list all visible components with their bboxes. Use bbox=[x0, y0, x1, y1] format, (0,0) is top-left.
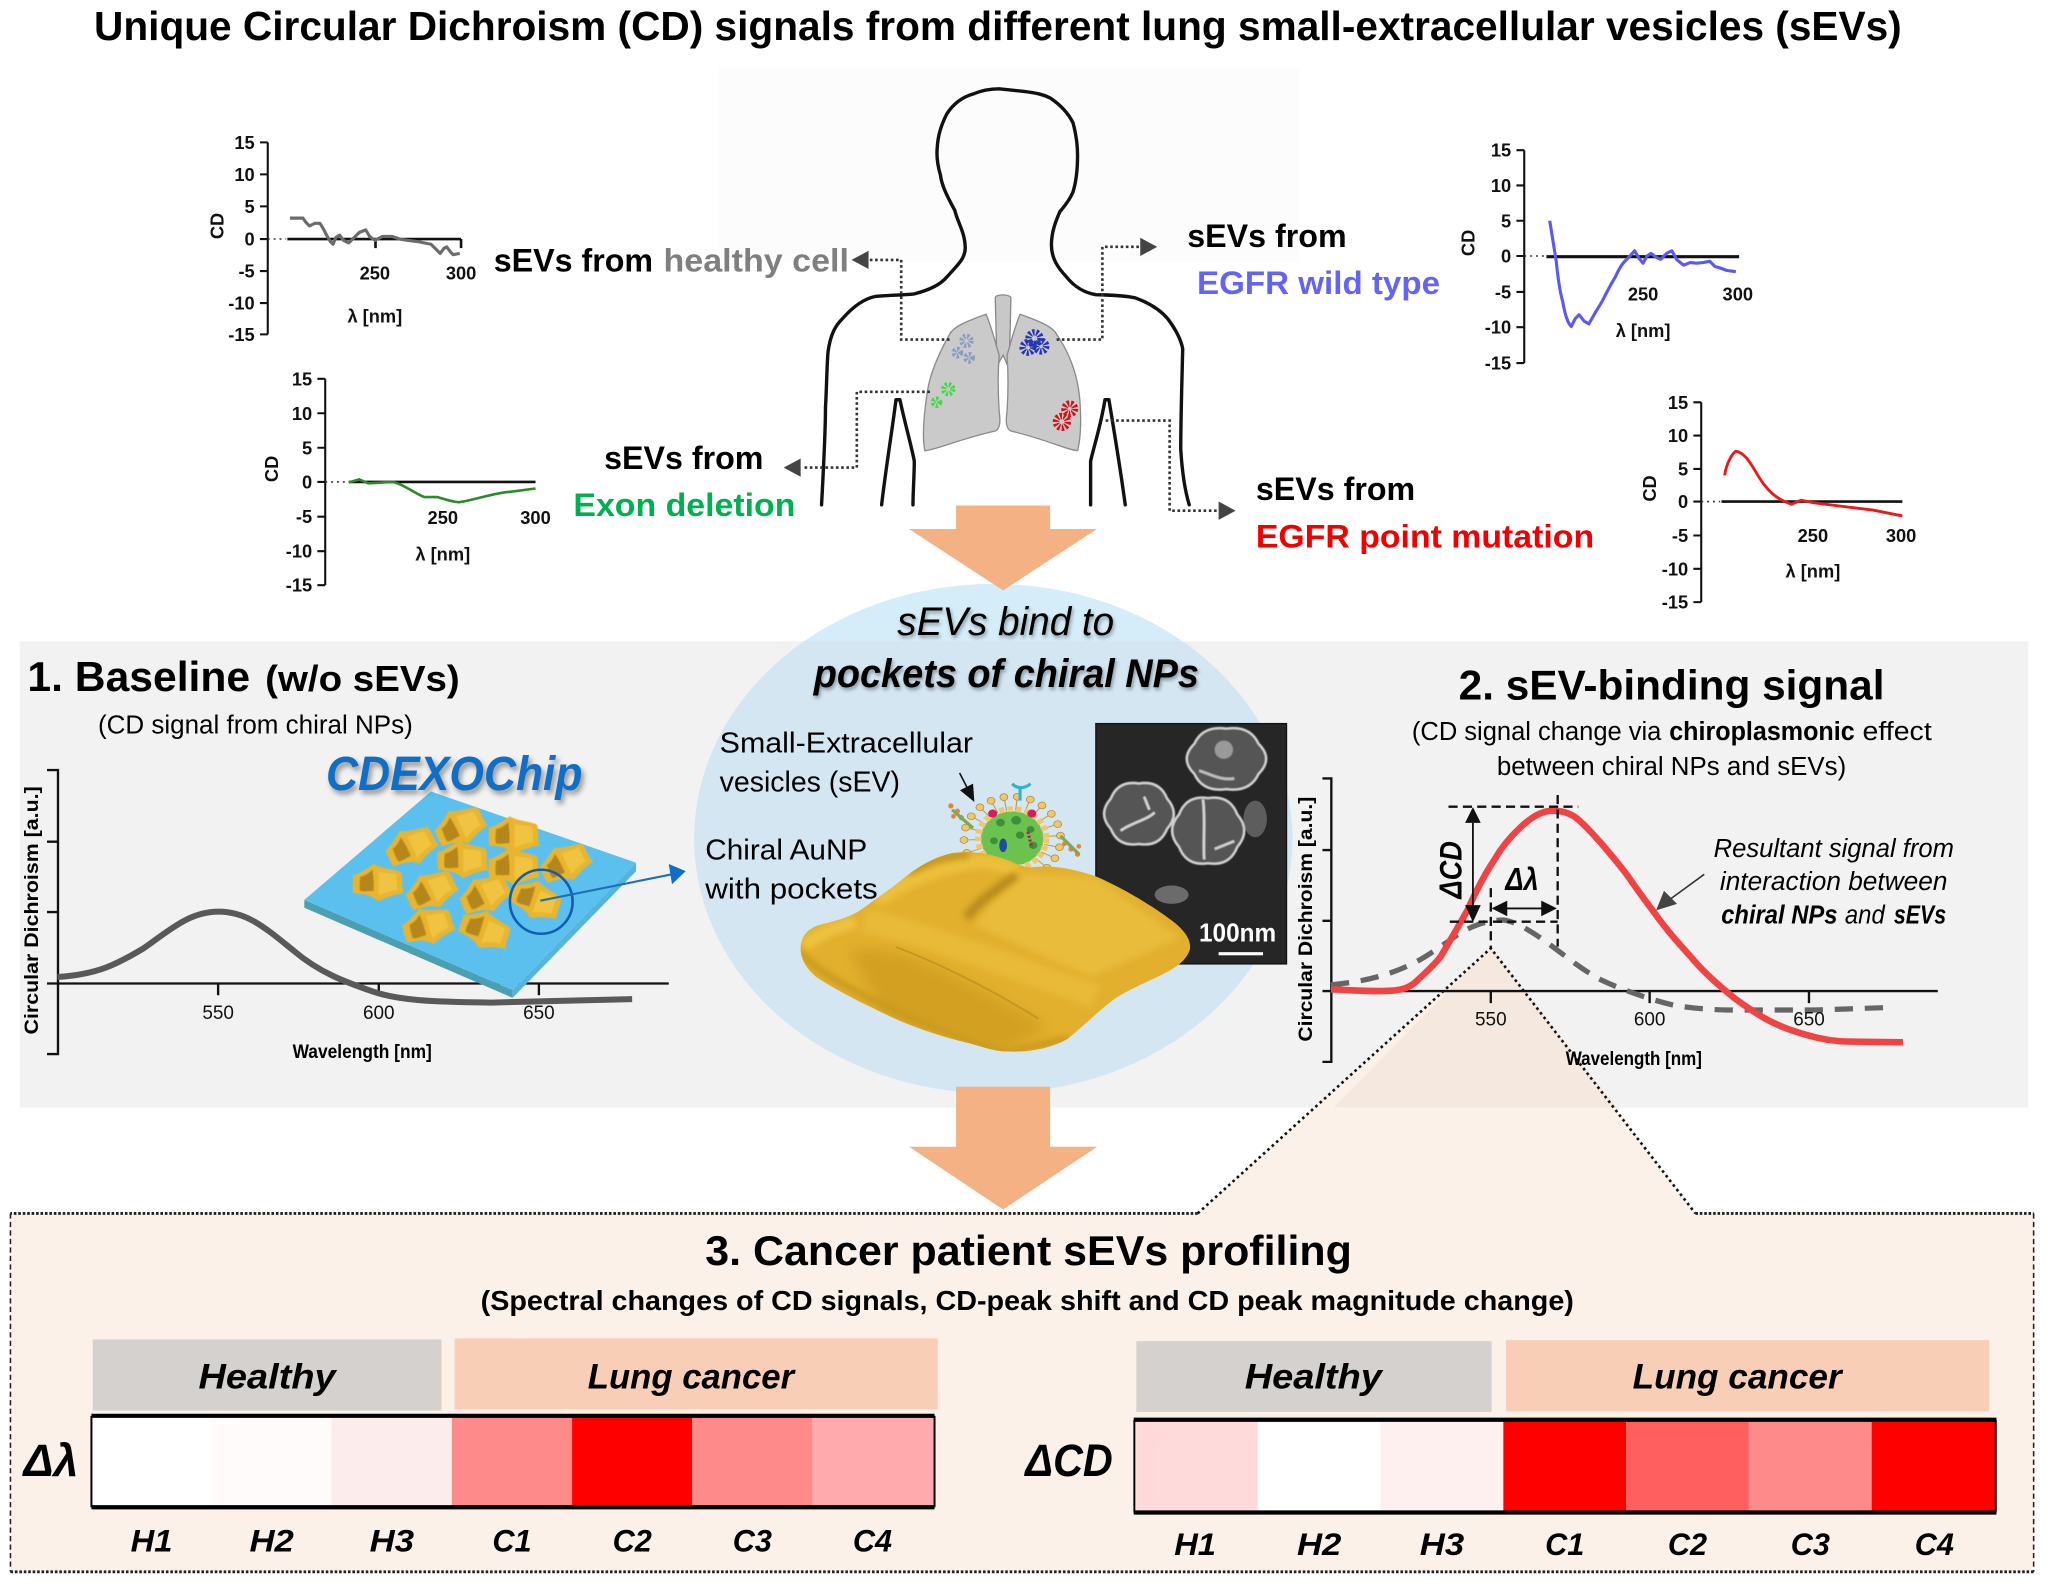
arrow: top orange arrow bbox=[909, 505, 1097, 590]
subtitle: (CD signal change via bbox=[1412, 718, 1662, 746]
icon: human body outline bbox=[822, 89, 1189, 505]
heading: 1. Baseline bbox=[27, 653, 250, 700]
heatmap: delta CD bbox=[1023, 1340, 1996, 1562]
heading: 2. sEV-binding signal bbox=[1459, 661, 1884, 708]
subtitle: effect bbox=[1863, 718, 1932, 746]
heatmap: delta CD: H2 bbox=[1297, 1527, 1342, 1562]
chart: EGFR wild type CD spectrum: 300 bbox=[1723, 283, 1753, 304]
chart: EGFR wild type CD spectrum: 250 bbox=[1628, 283, 1658, 304]
chart: baseline CD curve: Wavelength [nm] bbox=[293, 1042, 432, 1063]
icon: small extracellular vesicle bbox=[948, 784, 1081, 873]
chart: exon deletion CD spectrum: 5 bbox=[302, 437, 312, 458]
title: Unique Circular Dichroism (CD) signals from different lung small-extracellular vesicles (sEVs) bbox=[94, 3, 1902, 49]
chart: sEV-binding CD curves: Circular Dichroism [a.u.] bbox=[1295, 797, 1317, 1042]
chart: EGFR wild type CD spectrum: -15 bbox=[1485, 353, 1511, 374]
text block: resultant signal note: sEVs bbox=[1894, 901, 1946, 929]
chart: baseline CD curve: Circular Dichroism [a.u.] bbox=[21, 786, 43, 1034]
chart: EGFR point mutation CD spectrum: 0 bbox=[1678, 491, 1688, 512]
chart: sEV-binding CD curves: 550 bbox=[1475, 1009, 1507, 1030]
subtitle: chiroplasmonic bbox=[1669, 718, 1855, 746]
panel: 2. sEV-binding signal bbox=[1295, 661, 1954, 1070]
chart: EGFR wild type CD spectrum bbox=[1458, 140, 1753, 374]
text block: AuNP label bbox=[704, 834, 878, 906]
chart: healthy CD spectrum: 0 bbox=[245, 229, 255, 250]
heatmap: delta CD: H3 bbox=[1420, 1527, 1465, 1562]
chart: sEV-binding CD curves: 600 bbox=[1634, 1009, 1665, 1030]
text block: circle heading: pockets of chiral NPs bbox=[813, 652, 1199, 696]
text block: healthy cell label bbox=[494, 243, 849, 279]
arrow: to EGFR wild type label bbox=[1057, 238, 1157, 340]
image: SEM micrograph bbox=[1096, 724, 1287, 964]
background patch behind head bbox=[718, 67, 1300, 263]
text block: sEV label bbox=[720, 727, 974, 799]
panel: cancer patient profiling background bbox=[10, 948, 2034, 1572]
chart: EGFR wild type CD spectrum: -5 bbox=[1495, 281, 1511, 302]
chart: EGFR wild type CD spectrum: -10 bbox=[1485, 317, 1511, 338]
arrow: sEV pointer bbox=[960, 773, 974, 802]
heatmap: delta CD: H1 bbox=[1174, 1527, 1216, 1562]
label: delta lambda: Δλ bbox=[1505, 862, 1539, 897]
heatmap: delta lambda: Δλ bbox=[22, 1435, 78, 1486]
text block: EGFR point mutation label bbox=[1256, 471, 1594, 554]
heatmap: delta lambda: C4 bbox=[853, 1524, 892, 1559]
text block: AuNP label: with pockets bbox=[704, 874, 878, 906]
chart: exon deletion CD spectrum: λ [nm] bbox=[415, 543, 470, 564]
text block: sEV label: vesicles (sEV) bbox=[720, 767, 900, 799]
text block: circle heading: sEVs bind to bbox=[897, 600, 1114, 644]
heatmap: delta CD: C1 bbox=[1545, 1527, 1584, 1562]
text block: EGFR wild type label: EGFR wild type bbox=[1197, 265, 1440, 301]
chart: healthy CD spectrum: 250 bbox=[360, 263, 390, 284]
chart: EGFR point mutation CD spectrum: 5 bbox=[1678, 458, 1688, 479]
heatmap: delta lambda: C3 bbox=[733, 1524, 772, 1559]
chart: EGFR point mutation CD spectrum: 250 bbox=[1798, 525, 1828, 546]
image: SEM micrograph: 100nm bbox=[1199, 918, 1276, 948]
label: delta CD: ΔCD bbox=[1434, 841, 1469, 899]
panel: central circle bbox=[694, 584, 1292, 1093]
chart: baseline CD curve: 550 bbox=[202, 1003, 234, 1024]
arrow: to healthy cell label bbox=[852, 251, 950, 340]
label: CDEXOChip: CDEXOChip bbox=[326, 747, 583, 801]
heatmap: delta CD: Lung cancer bbox=[1633, 1357, 1844, 1396]
chart: EGFR point mutation CD spectrum: -10 bbox=[1662, 558, 1688, 579]
chart: EGFR point mutation CD spectrum: λ [nm] bbox=[1785, 560, 1840, 581]
chart: healthy CD spectrum: 5 bbox=[245, 196, 255, 217]
chart: exon deletion CD spectrum: 300 bbox=[520, 507, 551, 528]
chart: healthy CD spectrum: -10 bbox=[228, 293, 255, 314]
heatmap: delta lambda: C1 bbox=[492, 1524, 532, 1559]
panel: grey band for steps 1 and 2 bbox=[20, 641, 2028, 1108]
chart: EGFR wild type CD spectrum: λ [nm] bbox=[1616, 320, 1671, 341]
heatmap: delta lambda bbox=[22, 1338, 938, 1559]
heatmap: delta CD: C4 bbox=[1915, 1527, 1954, 1562]
text block: AuNP label: Chiral AuNP bbox=[705, 834, 867, 866]
chart: sEV-binding CD curves bbox=[1295, 778, 1938, 1070]
arrow: delta CD bbox=[1465, 807, 1481, 922]
chart: healthy CD spectrum: -5 bbox=[238, 261, 255, 282]
arrow: chip to nanoparticle bbox=[540, 864, 686, 901]
chart: exon deletion CD spectrum bbox=[261, 368, 551, 596]
text block: sEV label: Small-Extracellular bbox=[720, 727, 974, 759]
chart: healthy CD spectrum: -15 bbox=[228, 324, 255, 345]
panel: 1. Baseline bbox=[21, 653, 686, 1063]
heatmap: delta CD: C2 bbox=[1668, 1527, 1708, 1562]
chart: exon deletion CD spectrum: -10 bbox=[286, 541, 312, 562]
text block: exon deletion label bbox=[573, 440, 795, 523]
chart: sEV-binding CD curves: Wavelength [nm] bbox=[1566, 1049, 1702, 1070]
chart: exon deletion CD spectrum: -15 bbox=[286, 575, 312, 596]
heatmap: delta lambda: Healthy bbox=[199, 1357, 338, 1396]
chart: baseline CD curve bbox=[21, 770, 669, 1063]
heatmap: delta CD: ΔCD bbox=[1023, 1435, 1113, 1486]
chart: EGFR point mutation CD spectrum: 15 bbox=[1668, 392, 1688, 413]
icon: large chiral gold nanoparticle bbox=[801, 852, 1190, 1053]
chart: EGFR point mutation CD spectrum: CD bbox=[1639, 475, 1660, 502]
chart: exon deletion CD spectrum: CD bbox=[261, 456, 282, 482]
heatmap: delta lambda: H1 bbox=[131, 1524, 172, 1559]
chart: healthy CD spectrum: CD bbox=[206, 213, 227, 239]
text block: healthy cell label: sEVs from bbox=[494, 243, 653, 279]
chart: EGFR wild type CD spectrum: 0 bbox=[1501, 246, 1511, 267]
chart: healthy CD spectrum: 15 bbox=[234, 132, 255, 153]
chart: EGFR point mutation CD spectrum: 300 bbox=[1886, 525, 1916, 546]
text block: circle heading bbox=[813, 600, 1199, 696]
icon: CDEXOChip substrate bbox=[304, 792, 636, 998]
chart: exon deletion CD spectrum: 10 bbox=[292, 403, 312, 424]
chart: exon deletion CD spectrum: 0 bbox=[302, 471, 312, 492]
chart: healthy CD spectrum bbox=[206, 132, 476, 345]
subtitle bbox=[1412, 718, 1932, 781]
chart: exon deletion CD spectrum: 15 bbox=[292, 368, 312, 389]
arrow: delta lambda bbox=[1492, 901, 1557, 916]
chart: healthy CD spectrum: 10 bbox=[234, 164, 255, 185]
arrow: to exon deletion label bbox=[784, 392, 930, 477]
subtitle: (Spectral changes of CD signals, CD-peak shift and CD peak magnitude change) bbox=[481, 1285, 1574, 1316]
text block: exon deletion label: Exon deletion bbox=[573, 487, 795, 523]
heatmap: delta lambda: H2 bbox=[249, 1524, 295, 1559]
heatmap: delta lambda: C2 bbox=[613, 1524, 652, 1559]
heading: 3. Cancer patient sEVs profiling bbox=[705, 1227, 1352, 1274]
arrow: bottom orange arrow bbox=[909, 1087, 1097, 1209]
text block: resultant signal note bbox=[1714, 835, 1954, 929]
chart: EGFR wild type CD spectrum: 5 bbox=[1501, 210, 1511, 231]
chart: baseline CD curve: 650 bbox=[523, 1003, 555, 1024]
heatmap: delta lambda: H3 bbox=[370, 1524, 415, 1559]
heading bbox=[27, 653, 460, 700]
text block: resultant signal note: chiral NPs bbox=[1721, 901, 1837, 929]
subtitle: between chiral NPs and sEVs) bbox=[1497, 753, 1846, 781]
chart: healthy CD spectrum: 300 bbox=[446, 263, 476, 284]
text block: resultant signal note: interaction between bbox=[1720, 868, 1947, 896]
heading: (w/o sEVs) bbox=[265, 658, 460, 699]
text block: EGFR point mutation label: EGFR point mutation bbox=[1256, 518, 1594, 554]
chart: EGFR point mutation CD spectrum: 10 bbox=[1668, 425, 1688, 446]
chart: EGFR point mutation CD spectrum: -5 bbox=[1672, 525, 1688, 546]
arrow: to EGFR point mutation label bbox=[1106, 421, 1236, 520]
chart: healthy CD spectrum: λ [nm] bbox=[347, 306, 402, 327]
chart: baseline CD curve: 600 bbox=[363, 1003, 395, 1024]
text block: exon deletion label: sEVs from bbox=[604, 440, 763, 476]
panel: 3. profiling content bbox=[22, 1227, 1996, 1562]
chart: EGFR point mutation CD spectrum bbox=[1639, 392, 1916, 613]
chart: exon deletion CD spectrum: 250 bbox=[428, 507, 458, 528]
chart: EGFR wild type CD spectrum: 15 bbox=[1491, 140, 1511, 161]
arrow: note pointer bbox=[1656, 874, 1704, 910]
text block: EGFR point mutation label: sEVs from bbox=[1256, 471, 1415, 507]
icon: lungs with tumour clusters bbox=[923, 295, 1081, 451]
heatmap: delta CD: Healthy bbox=[1245, 1357, 1384, 1396]
heatmap: delta lambda: Lung cancer bbox=[588, 1357, 796, 1396]
chart: EGFR point mutation CD spectrum: -15 bbox=[1662, 592, 1688, 613]
chart: sEV-binding CD curves: 650 bbox=[1793, 1009, 1825, 1030]
subtitle: (CD signal from chiral NPs) bbox=[98, 711, 413, 739]
heatmap: delta CD: C3 bbox=[1791, 1527, 1830, 1562]
text block: resultant signal note: Resultant signal from bbox=[1714, 835, 1954, 863]
chart: EGFR wild type CD spectrum: 10 bbox=[1491, 175, 1511, 196]
text block: healthy cell label: healthy cell bbox=[664, 243, 849, 279]
chart: EGFR wild type CD spectrum: CD bbox=[1458, 230, 1479, 256]
text block: resultant signal note: and bbox=[1845, 901, 1886, 929]
text block: EGFR wild type label bbox=[1187, 218, 1440, 301]
text block: EGFR wild type label: sEVs from bbox=[1187, 218, 1347, 254]
chart: exon deletion CD spectrum: -5 bbox=[296, 506, 312, 527]
